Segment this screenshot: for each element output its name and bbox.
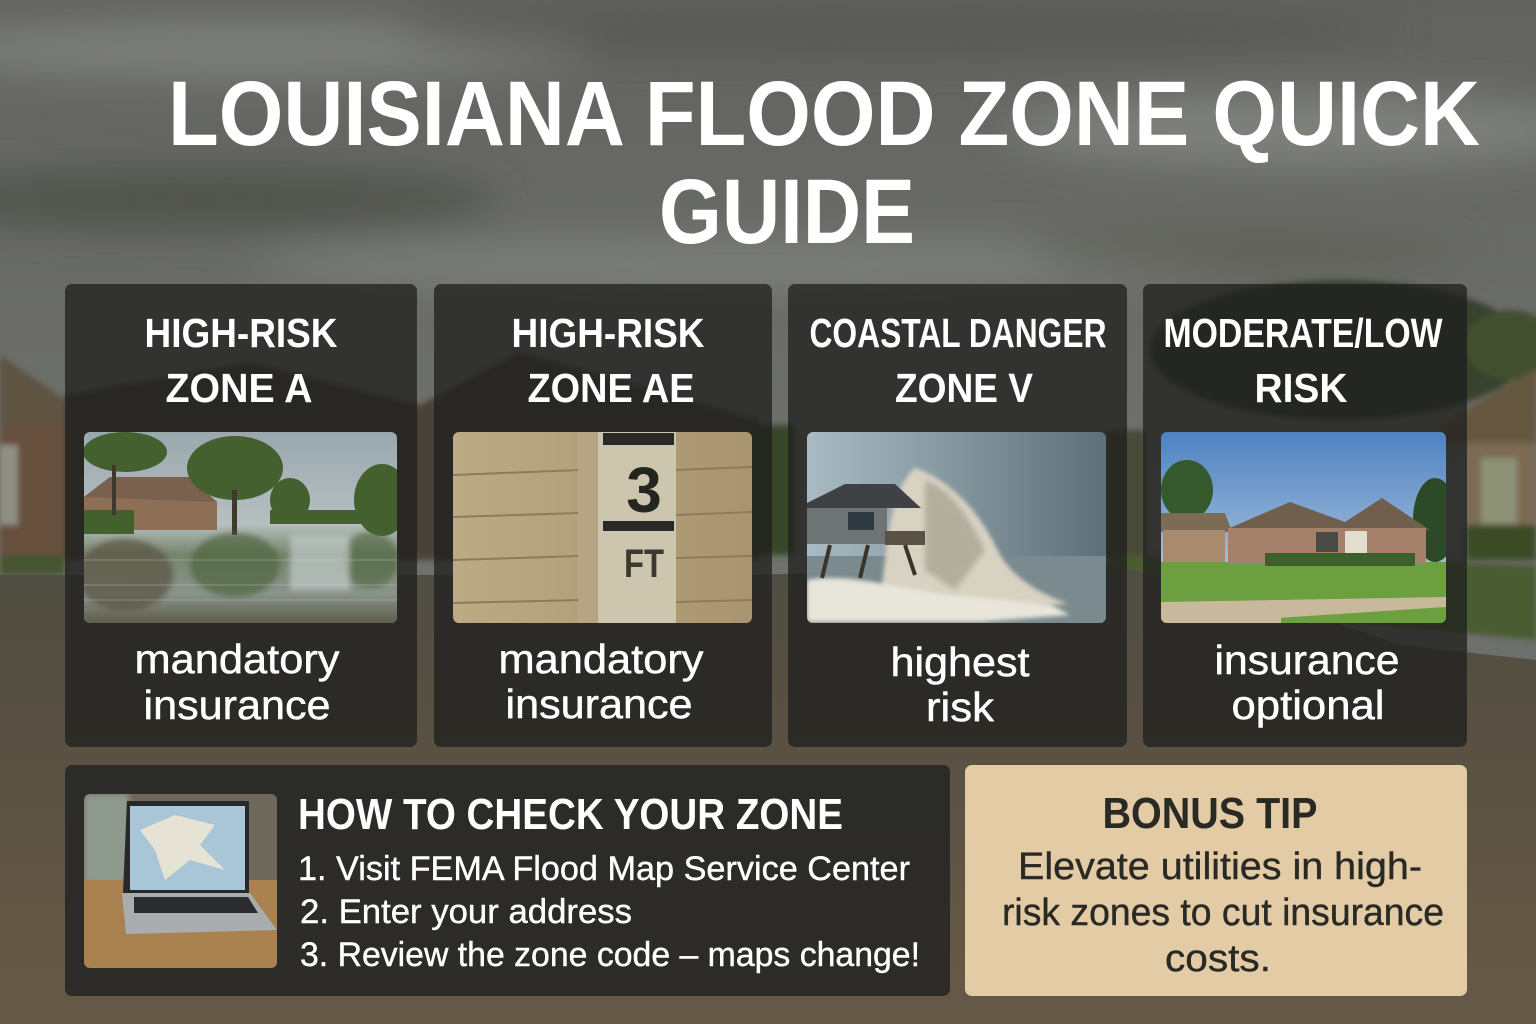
heading: zone V <box>810 310 1106 411</box>
title: GUIDE <box>659 161 915 263</box>
heading: how to check: HOW TO CHECK YOUR ZONE <box>298 790 843 839</box>
panel: how to check your zone <box>65 765 950 996</box>
heading: zone AE: HIGH-RISK <box>512 310 705 356</box>
panel: moderate/low risk <box>1143 284 1467 747</box>
heading: moderate/low risk: RISK <box>1254 365 1348 411</box>
bonus tip body: Elevate utilities in high- <box>1018 846 1422 888</box>
photo: 3 ft flood depth marker on siding: 3 <box>626 454 662 526</box>
heading: moderate/low risk <box>1164 310 1443 411</box>
caption: zone V <box>890 639 1030 730</box>
panel: zone V <box>788 284 1127 747</box>
heading: zone A: HIGH-RISK <box>144 310 338 356</box>
panel: zone AE <box>434 284 772 747</box>
steps list: 1. Visit FEMA Flood Map Service Center <box>298 850 910 888</box>
panel: zone A <box>65 284 417 747</box>
caption: zone A: insurance <box>144 682 330 728</box>
heading: zone AE: ZONE AE <box>528 365 694 411</box>
caption: zone AE: insurance <box>506 681 692 727</box>
caption: zone AE <box>498 636 704 727</box>
heading: bonus tip: BONUS TIP <box>1102 789 1318 838</box>
caption: moderate/low risk: optional <box>1232 682 1384 728</box>
steps list <box>298 850 920 974</box>
caption: zone V: highest <box>890 639 1030 685</box>
steps list: 2. Enter your address <box>300 893 632 931</box>
photo: 3 ft flood depth marker on siding <box>453 432 752 623</box>
heading: zone V: ZONE V <box>895 365 1034 411</box>
bonus tip body: costs. <box>1165 938 1271 980</box>
heading: zone A <box>144 310 338 411</box>
caption: zone V: risk <box>926 684 995 730</box>
photo: storm wave hitting stilt house <box>807 432 1106 623</box>
caption: moderate/low risk: insurance <box>1214 637 1400 683</box>
panel: bonus tip <box>965 765 1467 996</box>
caption: zone A: mandatory <box>134 636 340 682</box>
photo: laptop showing flood map <box>84 794 277 968</box>
steps list: 3. Review the zone code – maps change! <box>300 936 920 974</box>
heading: moderate/low risk: MODERATE/LOW <box>1164 310 1443 356</box>
title <box>168 63 1480 263</box>
caption: moderate/low risk <box>1214 637 1400 728</box>
photo: brick house with green lawn <box>1161 432 1457 623</box>
bonus tip body <box>1002 846 1444 980</box>
heading: zone AE <box>512 310 705 411</box>
heading: zone V: COASTAL DANGER <box>810 310 1106 356</box>
caption: zone A <box>134 636 340 728</box>
bonus tip body: risk zones to cut insurance <box>1002 892 1444 934</box>
caption: zone AE: mandatory <box>498 636 704 682</box>
photo: 3 ft flood depth marker on siding: FT <box>624 542 664 586</box>
photo: flooded street with trees <box>77 432 410 623</box>
heading: zone A: ZONE A <box>166 365 312 411</box>
